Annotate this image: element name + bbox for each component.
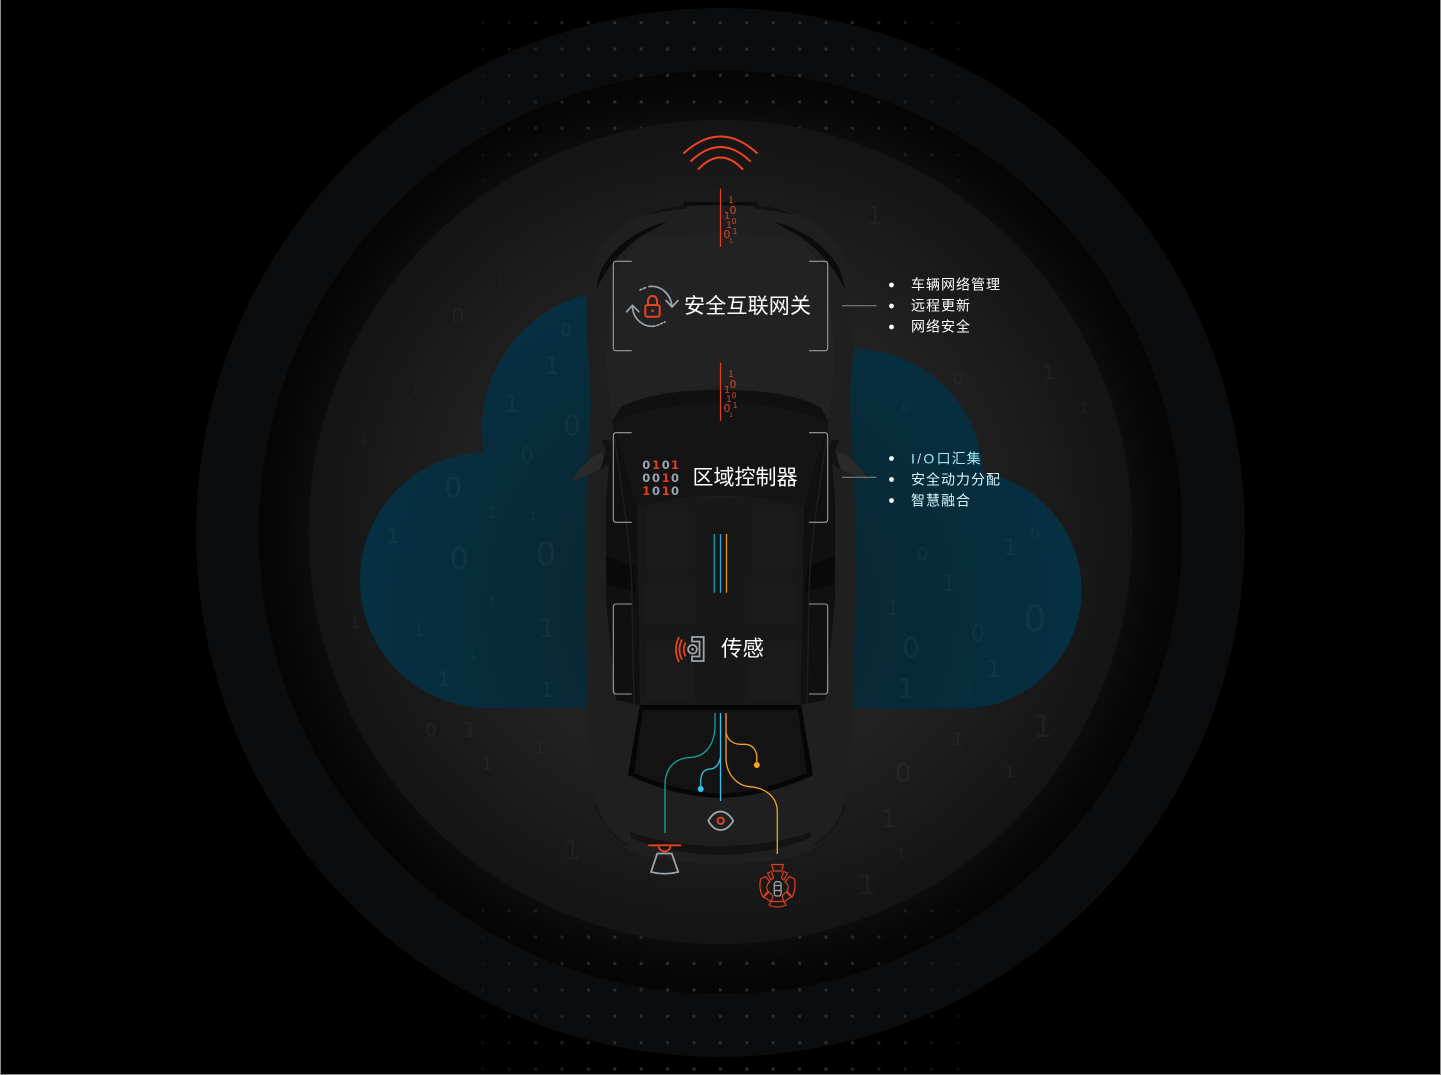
data line: top with binary digits: 1 xyxy=(729,238,733,245)
icon: binary grid: 1 xyxy=(662,484,670,498)
data line: middle with binary digits: 1 xyxy=(732,401,738,410)
icon: binary grid: 0 xyxy=(671,484,679,498)
icon: binary grid: 1 xyxy=(671,458,679,472)
data line: top with binary digits: 1 xyxy=(732,227,738,236)
icon: radar sensor xyxy=(648,845,681,874)
faint binary digits: 1 xyxy=(487,503,497,522)
data line: middle with binary digits: 1 xyxy=(729,412,733,419)
list: zone controller functions xyxy=(889,450,1001,508)
faint binary digits: 1 xyxy=(881,805,897,833)
data line: middle with binary digits: 1 xyxy=(726,395,732,405)
list: gateway functions xyxy=(889,276,1001,334)
faint binary digits: 0 xyxy=(971,622,985,647)
icon: lock with rotating arrows xyxy=(627,286,678,326)
faint binary digits xyxy=(351,202,1088,901)
faint binary digits: 0 xyxy=(536,535,556,573)
icon: surround sensors xyxy=(760,864,795,907)
faint binary digits: 1 xyxy=(504,390,520,418)
faint binary digits: 1 xyxy=(529,509,537,523)
faint binary digits: 1 xyxy=(966,682,974,695)
heading: 区域控制器 xyxy=(692,466,798,490)
faint binary digits: 0 xyxy=(902,631,920,664)
data line: middle with binary digits: 1 xyxy=(728,370,734,380)
data lines: controller to sensing xyxy=(714,534,726,593)
faint binary digits: 1 xyxy=(544,352,560,380)
faint binary digits: 1 xyxy=(387,524,399,548)
faint binary digits: 1 xyxy=(897,672,915,705)
icon: binary grid: 0 xyxy=(642,458,650,472)
icon: wifi xyxy=(684,136,757,169)
list: zone controller functions: 智慧融合 xyxy=(911,492,971,508)
faint binary digits: 1 xyxy=(481,754,493,775)
faint binary digits: 1 xyxy=(887,596,899,620)
connector: gateway xyxy=(842,305,876,307)
data line: top with binary digits: 0 xyxy=(731,217,737,226)
faint binary digits: 0 xyxy=(901,401,909,415)
list: gateway functions: 远程更新 xyxy=(911,298,971,314)
data line: middle with binary digits: 0 xyxy=(731,391,737,400)
faint binary digits: 1 xyxy=(351,616,359,632)
faint binary digits: 1 xyxy=(1043,363,1055,384)
icon: binary grid: 0 xyxy=(652,471,660,485)
faint binary digits: 0 xyxy=(563,409,581,442)
faint binary digits: 1 xyxy=(942,572,956,597)
faint binary digits: 0 xyxy=(444,471,462,504)
cloud xyxy=(360,290,1082,708)
list: gateway functions: 网络安全 xyxy=(911,318,971,334)
dot grid xyxy=(481,21,960,1071)
faint binary digits: 1 xyxy=(469,648,477,662)
faint binary digits: 1 xyxy=(1006,765,1014,781)
data line: top with binary digits: 0 xyxy=(730,204,736,217)
connector: zone controller xyxy=(842,476,876,478)
faint binary digits: 0 xyxy=(917,544,929,565)
faint binary digits: 1 xyxy=(497,273,505,287)
faint binary digits: 1 xyxy=(1003,536,1017,561)
faint binary digits: 1 xyxy=(539,614,555,644)
panel: sensing xyxy=(613,604,828,694)
heading: 传感 xyxy=(721,637,764,661)
faint binary digits: 0 xyxy=(1024,599,1046,640)
inner disk xyxy=(308,120,1132,944)
faint binary digits: 1 xyxy=(488,596,496,611)
heading: 安全互联网关 xyxy=(684,295,811,318)
icon: binary grid: 1 xyxy=(652,458,660,472)
faint binary digits: 0 xyxy=(895,759,911,789)
icon: binary grid: 0 xyxy=(671,471,679,485)
icon: binary grid: 1 xyxy=(642,484,650,498)
car xyxy=(572,202,869,864)
faint binary digits: 1 xyxy=(867,202,883,230)
data line: middle with binary digits: 0 xyxy=(724,402,730,415)
bracket frame xyxy=(613,433,828,522)
faint binary digits: 1 xyxy=(564,836,580,866)
faint binary digits: 0 xyxy=(449,542,469,577)
faint binary digits: 1 xyxy=(412,386,418,397)
faint binary digits: 1 xyxy=(858,868,876,901)
icon: binary grid: 0 xyxy=(652,484,660,498)
data line: top with binary digits: 1 xyxy=(728,196,734,206)
data lines: rear routing xyxy=(665,713,777,854)
faint binary digits: 1 xyxy=(897,847,905,862)
list: zone controller functions: 安全动力分配 xyxy=(911,472,1001,488)
data line: middle with binary digits: 0 xyxy=(730,378,736,391)
faint binary digits: 1 xyxy=(438,667,450,691)
faint binary digits: 1 xyxy=(541,678,553,702)
faint binary digits: 1 xyxy=(952,729,964,750)
faint binary digits: 1 xyxy=(986,655,1002,683)
faint binary digits: 1 xyxy=(413,620,425,641)
bracket frame xyxy=(613,604,828,694)
icon: binary grid: 0 xyxy=(662,458,670,472)
data line: middle with binary digits xyxy=(720,363,738,421)
panel: zone controller xyxy=(613,433,828,522)
faint binary digits: 0 xyxy=(452,304,464,328)
icon: binary grid xyxy=(642,458,679,498)
icon: binary grid: 1 xyxy=(662,471,670,485)
icon: eye xyxy=(708,812,733,830)
panel: secure gateway xyxy=(613,261,828,351)
icon: sensor xyxy=(676,637,704,662)
data line: top with binary digits: 1 xyxy=(724,211,730,222)
data line: middle with binary digits: 1 xyxy=(724,385,730,396)
faint binary digits: 0 xyxy=(953,369,963,388)
faint binary digits: 1 xyxy=(536,741,544,757)
faint binary digits: 0 xyxy=(425,720,437,741)
icon: binary grid: 0 xyxy=(642,471,650,485)
list: zone controller functions: I/O口汇集 xyxy=(911,450,982,466)
faint binary digits: 0 xyxy=(560,320,572,341)
list: gateway functions: 车辆网络管理 xyxy=(911,276,1001,292)
data line: top with binary digits: 1 xyxy=(726,221,732,231)
data line: top with binary digits: 0 xyxy=(724,228,730,241)
faint binary digits: 1 xyxy=(361,434,367,445)
faint binary digits: 1 xyxy=(1080,401,1088,417)
faint binary digits: 0 xyxy=(1030,524,1040,543)
faint binary digits: 1 xyxy=(464,718,476,742)
faint binary digits: 0 xyxy=(521,443,533,467)
data line: top with binary digits xyxy=(720,188,738,247)
faint binary digits: 1 xyxy=(1033,710,1053,745)
bracket frame xyxy=(613,261,828,351)
